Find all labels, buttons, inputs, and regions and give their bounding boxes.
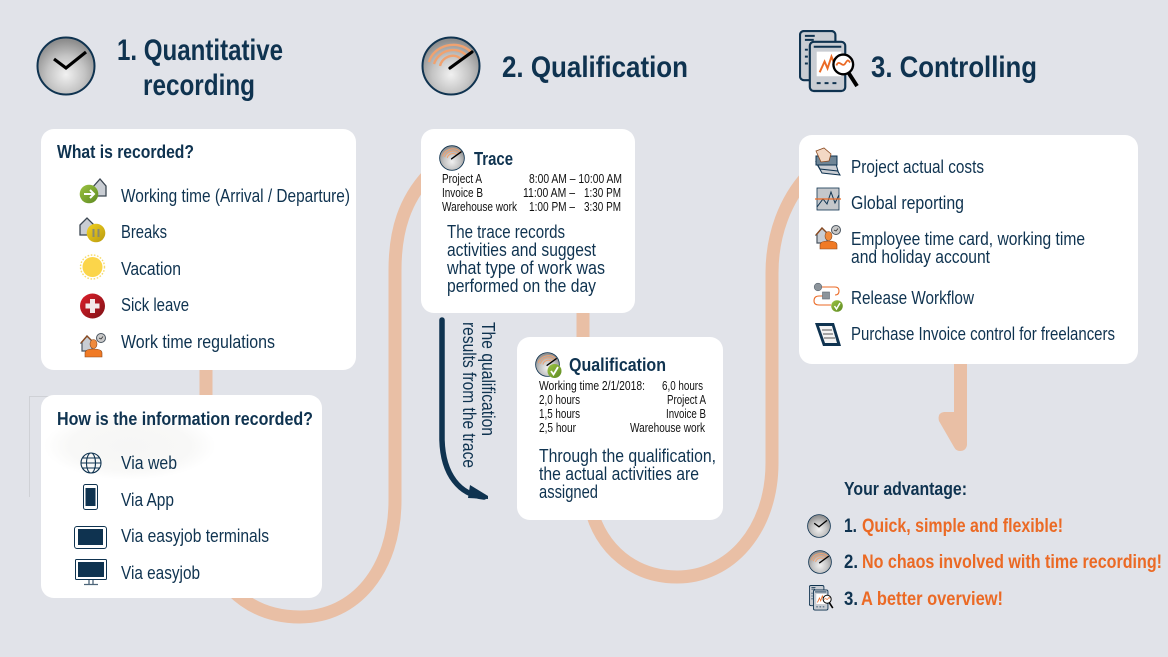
panel: trace	[421, 129, 635, 313]
trace table	[442, 172, 622, 214]
employee text: and holiday account	[851, 246, 990, 267]
icon: desktop monitor	[76, 560, 106, 584]
panel: what is recorded: What is recorded?	[57, 142, 194, 162]
icon: break house	[80, 218, 105, 242]
trace table: Invoice B	[442, 186, 483, 200]
icon: arrival house	[80, 179, 106, 203]
qualification table: 2,0 hours	[539, 393, 580, 407]
trace description: activities and suggest	[447, 239, 596, 260]
icon: workflow	[814, 283, 843, 312]
panel: what is recorded: Sick leave	[121, 294, 189, 315]
qualification description: the actual activities are	[539, 463, 699, 484]
heading: step 1	[38, 34, 283, 102]
icon: controlling document	[800, 31, 857, 91]
panel: how is the information recorded: Via easyjob terminals	[121, 525, 269, 546]
trace description	[446, 221, 605, 296]
panel: your advantage	[808, 479, 1162, 610]
qualification table: 2,5 hour	[539, 421, 576, 435]
trace description: performed on the day	[447, 275, 597, 296]
qualification description: Through the qualification,	[539, 445, 716, 466]
panel: what is recorded: Work time regulations	[121, 331, 275, 352]
panel: what is recorded: Breaks	[121, 221, 167, 242]
qualification table: Invoice B	[666, 407, 706, 421]
trace table: Warehouse work	[442, 200, 518, 214]
icon: sun	[80, 255, 104, 279]
panel: trace: Trace	[474, 149, 513, 169]
trace table: 11:00 AM –	[523, 186, 575, 200]
employee text	[851, 228, 1085, 267]
icon: invoice	[815, 323, 841, 346]
advantage 2: 2.	[844, 552, 858, 573]
faint frame artefact	[30, 396, 240, 497]
trace table: 3:30 PM	[584, 200, 621, 214]
qualification description	[539, 445, 716, 502]
arrow: controlling to advantage	[939, 360, 967, 451]
panel: what is recorded: Working time (Arrival / Departure)	[121, 185, 350, 206]
panel: controlling: Release Workflow	[851, 287, 975, 308]
icon: trace dial	[440, 146, 464, 170]
trace table: 8:00 AM – 10:00 AM	[529, 172, 622, 186]
icon: qualification dial with check	[536, 353, 562, 378]
arrow: trace to qualification	[442, 320, 488, 499]
heading: step 1: 1. Quantitative	[117, 34, 283, 67]
panel: how is the information recorded: Via web	[121, 452, 177, 473]
icon: employee	[816, 226, 840, 249]
trace table: 1:00 PM –	[529, 200, 575, 214]
qualification table	[539, 379, 707, 435]
qualification table: Project A	[667, 393, 707, 407]
trace description: what type of work was	[446, 257, 605, 278]
employee text: Employee time card, working time	[851, 228, 1085, 249]
qualification table: 1,5 hours	[539, 407, 580, 421]
panel: controlling	[799, 135, 1138, 364]
qualification table: Warehouse work	[630, 421, 706, 435]
panel: how is the information recorded: Via App	[121, 489, 174, 510]
rotated note: results from the trace	[459, 322, 480, 468]
icon: clock	[38, 38, 94, 94]
advantage 3: 3.	[844, 589, 858, 610]
heading: step 3	[800, 31, 1037, 91]
panel: your advantage: Your advantage:	[844, 479, 967, 499]
qualification table: 6,0 hours	[662, 379, 703, 393]
icon: costs	[816, 148, 840, 175]
icon: employee regulations	[81, 334, 106, 357]
trace table: Project A	[442, 172, 483, 186]
panel: controlling: Project actual costs	[851, 156, 984, 177]
advantage 3: A better overview!	[861, 589, 1003, 610]
panel: controlling: Global reporting	[851, 192, 964, 213]
panel: controlling: Purchase Invoice control for freelancers	[851, 323, 1115, 344]
advantage 3	[809, 586, 1003, 610]
rotated note	[459, 322, 499, 468]
heading: step 3: 3. Controlling	[871, 51, 1037, 84]
heading: step 2: 2. Qualification	[502, 51, 688, 84]
icon: dial	[422, 38, 480, 94]
trace table: 1:30 PM	[584, 186, 621, 200]
trace description: The trace records	[447, 221, 565, 242]
advantage 1: 1.	[844, 516, 857, 537]
qualification description: assigned	[539, 481, 598, 502]
qualification table: Working time 2/1/2018:	[539, 379, 645, 393]
icon: terminal	[74, 526, 106, 548]
connector path: qualification to controlling	[583, 175, 808, 577]
panel: qualification: Qualification	[569, 355, 666, 375]
panel: how is the information recorded: How is the information recorded?	[57, 409, 313, 429]
panel: qualification	[517, 337, 723, 520]
icon: reporting chart	[815, 188, 841, 210]
heading: step 2	[422, 38, 688, 94]
panel: how is the information recorded: Via easyjob	[121, 562, 200, 583]
connector path: recording to qualification	[206, 175, 428, 617]
panel: what is recorded	[41, 129, 356, 370]
icon: globe	[81, 453, 101, 473]
advantage 1: Quick, simple and flexible!	[862, 516, 1063, 537]
icon: smartphone	[84, 484, 98, 510]
advantage 1	[808, 515, 1063, 537]
panel: what is recorded: Vacation	[121, 258, 181, 279]
heading: step 1: recording	[143, 69, 255, 102]
panel: how is the information recorded	[41, 395, 322, 598]
icon: medical cross	[80, 294, 105, 318]
rotated note: The qualification	[478, 322, 499, 436]
